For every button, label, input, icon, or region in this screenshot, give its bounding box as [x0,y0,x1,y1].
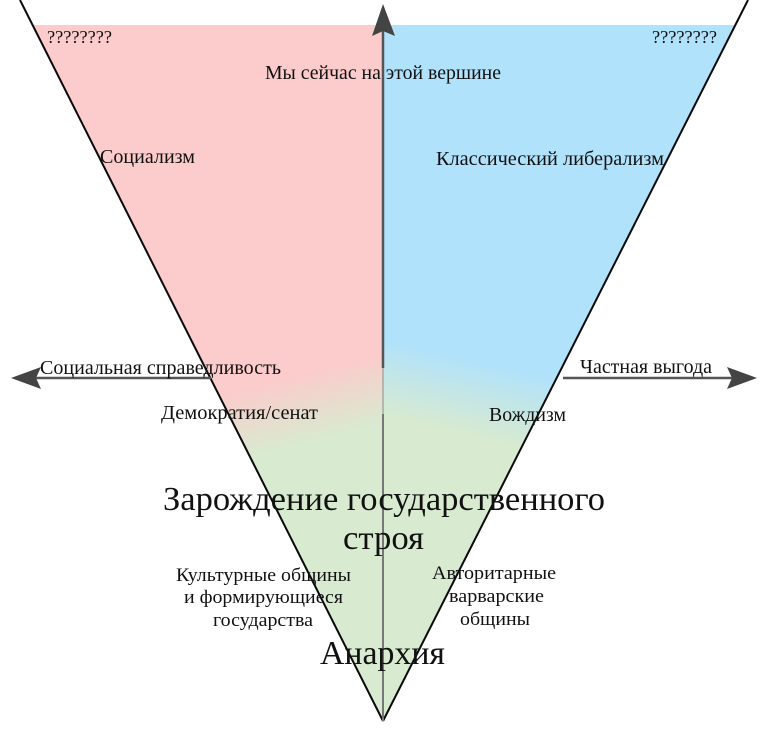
heading: anarchy: Анархия [320,635,445,672]
arrow: vertical axis [372,4,395,721]
arrow: right horizontal axis [563,367,757,389]
label: cultural communities: Культурные общины [176,565,351,586]
heading: birth of the state system: строя [343,520,424,557]
label: left question marks: ???????? [47,27,112,47]
label: classical liberalism: Классический либерализм [436,149,664,170]
label: social justice: Социальная справедливость [40,358,281,379]
label: authoritarian barbarian communities: варварские [449,586,544,607]
label: authoritarian barbarian communities: Авторитарные [432,563,556,584]
label: democracy and senate: Демократия/сенат [161,403,318,424]
label: authoritarian barbarian communities: общины [460,609,530,630]
label: cultural communities: и формирующиеся [184,587,343,608]
panel: right blue and green half [383,25,735,721]
label: private benefit: Частная выгода [580,357,712,378]
label: chiefdom: Вождизм [489,405,566,426]
arrow: left horizontal axis [11,367,211,389]
heading: birth of the state system: Зарождение государственного [163,481,605,518]
label: authoritarian barbarian communities [432,563,556,630]
label: right question marks: ???????? [652,27,717,47]
heading: birth of the state system [163,481,605,557]
label: socialism: Социализм [100,147,195,168]
label: cultural communities [176,565,351,631]
label: cultural communities: государства [213,610,314,631]
label: current peak: Мы сейчас на этой вершине [265,63,501,84]
panel: left pink and green half [32,25,383,721]
